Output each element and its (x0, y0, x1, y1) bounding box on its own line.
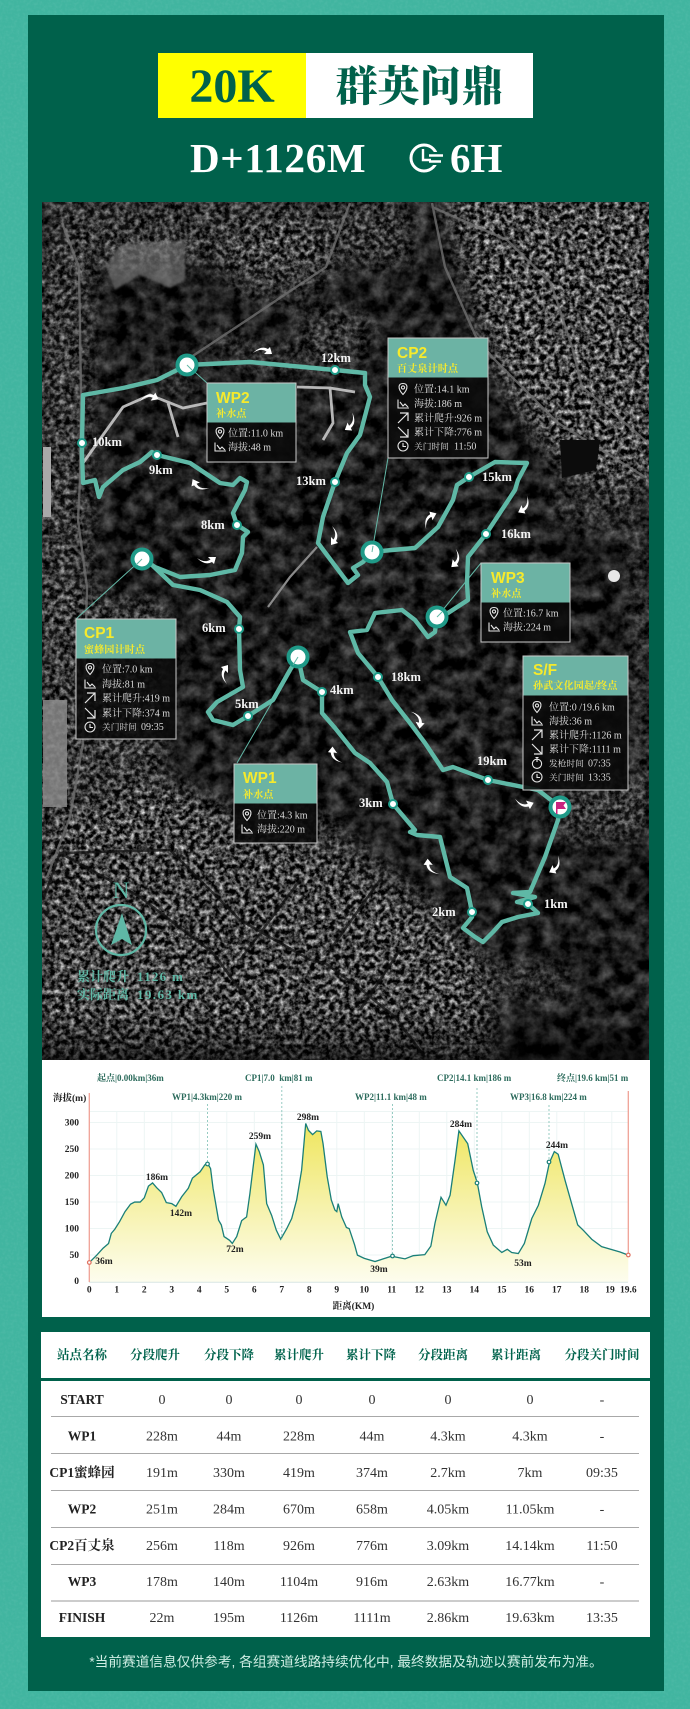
row: START: 0 (444, 1393, 452, 1408)
row: WP1 (68, 1428, 605, 1444)
kilometre markers: 9km (149, 463, 173, 477)
kilometre markers: 16km (501, 527, 531, 541)
y axis labels: 50 (70, 1251, 79, 1261)
callout: CP2 (388, 338, 488, 458)
callout: S/F: 孙武文化园起/终点 (533, 679, 618, 692)
kilometre markers: 19km (477, 754, 507, 768)
callout: WP3: 海拔:224 m (503, 620, 551, 634)
waypoint labels: WP1|4.3km|220 m (172, 1092, 242, 1102)
table header (41, 1332, 650, 1378)
x axis labels: 13 (442, 1286, 452, 1296)
panel: elevation profile chart (42, 1060, 650, 1317)
callout: S/F: 13:35 (588, 772, 611, 784)
kilometre markers: 8km (201, 518, 225, 532)
row: FINISH: 19.63km (505, 1611, 555, 1626)
callout: CP2: 海拔:186 m (414, 397, 462, 410)
x axis labels: 3 (169, 1286, 174, 1296)
row: CP2: 11:50 (586, 1539, 618, 1554)
y axis labels: 250 (65, 1145, 79, 1155)
kilometre markers: 4km (330, 683, 354, 697)
x axis labels: 18 (580, 1286, 589, 1296)
callout: S/F: 位置:0 /19.6 km (549, 702, 615, 714)
row: CP1: 374m (356, 1466, 388, 1481)
row: FINISH (59, 1610, 618, 1626)
course totals (77, 969, 199, 1002)
x axis labels: 12 (415, 1286, 424, 1296)
title tag: race name (306, 53, 533, 118)
row: WP1: 44m (360, 1430, 385, 1444)
waypoint labels: CP2|14.1 km|186 m (437, 1073, 512, 1083)
callout: WP3: 补水点 (491, 587, 522, 600)
map imagery: forest and urban texture (42, 202, 649, 1060)
row: CP1: 09:35 (586, 1466, 618, 1481)
kilometre markers (78, 351, 568, 919)
y axis labels (53, 1092, 86, 1287)
row: FINISH: FINISH (59, 1610, 106, 1625)
row: START: 0 (226, 1393, 232, 1408)
course totals: 实际距离 (77, 987, 129, 1002)
row: WP3: 140m (213, 1575, 245, 1590)
x axis labels: 7 (279, 1286, 284, 1296)
row: WP3: 178m (146, 1575, 178, 1590)
callout: S/F: 关门时间 (549, 772, 584, 782)
callout: S/F: 累计下降:1111 m (549, 742, 621, 756)
x axis labels: 10 (360, 1286, 369, 1296)
x axis labels: 2 (142, 1286, 147, 1296)
table header: 累计距离 (491, 1347, 541, 1362)
callout: CP2: 位置:14.1 km (414, 384, 470, 396)
race stats: elevation gain and cut-off: D+1126M (190, 135, 366, 181)
row: FINISH: 1111m (353, 1611, 391, 1626)
course totals: 19.63 km (137, 987, 199, 1002)
x axis labels: 6 (252, 1286, 257, 1296)
start/finish flag marker (550, 798, 570, 816)
x axis labels: 距离(KM) (333, 1300, 374, 1312)
row: CP2: 926m (283, 1539, 315, 1554)
title tag: distance (158, 53, 306, 118)
row: FINISH: 1126m (280, 1611, 318, 1626)
callout: CP1: 海拔:81 m (102, 678, 145, 690)
callout: CP1: CP1 (84, 625, 115, 642)
row: CP2 (49, 1537, 618, 1554)
row: WP3: - (600, 1575, 605, 1590)
row: WP2 (68, 1502, 605, 1518)
direction arrows (139, 347, 564, 878)
x axis labels: 19 (605, 1286, 615, 1296)
x axis labels (87, 1286, 637, 1312)
title tag: race name: 群英问鼎 (335, 64, 504, 111)
table header: 累计下降 (346, 1347, 396, 1362)
kilometre markers: 18km (391, 670, 421, 684)
row: START: 0 (368, 1393, 376, 1408)
icon: north compass (96, 878, 146, 955)
callout: CP1: 累计爬升:419 m (102, 692, 170, 704)
kilometre markers: 2km (432, 905, 456, 919)
row: WP1: 4.3km (512, 1430, 548, 1444)
kilometre markers: 6km (202, 621, 226, 635)
callout: CP2: 百丈泉计时点 (397, 362, 459, 375)
x axis labels: 4 (197, 1286, 202, 1296)
y axis labels: 150 (65, 1198, 79, 1208)
x axis labels: 9 (334, 1286, 339, 1296)
title tag: distance: 20K (189, 60, 275, 113)
callout: CP2: 累计爬升:926 m (414, 412, 482, 424)
y axis labels: 0 (74, 1277, 79, 1287)
callout: CP1: 关门时间 (102, 721, 137, 732)
row: START: 0 (526, 1393, 534, 1408)
row: FINISH: 22m (150, 1611, 175, 1626)
table header: 分段关门时间 (564, 1347, 640, 1362)
row: WP2: 251m (146, 1502, 178, 1518)
waypoint labels (97, 1072, 629, 1102)
waypoint labels: 终点|19.6 km|51 m (557, 1072, 629, 1083)
y axis labels: 300 (65, 1118, 79, 1128)
callout: WP1: 补水点 (243, 788, 274, 801)
callout: WP2: WP2 (216, 390, 250, 407)
x axis labels: 19.6 (620, 1286, 637, 1296)
footnote: *当前赛道信息仅供参考, 各组赛道线路持续优化中, 最终数据及轨迹以赛前发布为准。 (89, 1654, 603, 1670)
title banner (158, 53, 533, 118)
callout: WP3: WP3 (491, 570, 525, 587)
row: FINISH: 13:35 (586, 1611, 618, 1626)
race stats: elevation gain and cut-off (190, 135, 502, 181)
callout: CP2: CP2 (397, 345, 427, 362)
x axis labels: 16 (525, 1286, 534, 1296)
row: CP1: CP1蜜蜂园 (49, 1464, 115, 1480)
callout: CP2: 累计下降:776 m (414, 426, 482, 438)
profile point markers (88, 1160, 630, 1264)
row: WP1: 44m (217, 1430, 242, 1444)
kilometre markers: 12km (321, 351, 351, 365)
callout: CP1: 09:35 (141, 722, 164, 733)
callout: WP2: 位置:11.0 km (228, 428, 283, 440)
row: CP1: 2.7km (430, 1466, 466, 1481)
x axis labels: 14 (470, 1286, 479, 1296)
callout: CP2: 关门时间 (414, 440, 449, 452)
kilometre markers: 3km (359, 796, 383, 810)
elevation area and line (89, 1123, 628, 1282)
callout: CP1 (76, 619, 176, 739)
peak and valley labels: 72m (226, 1245, 244, 1255)
callout: S/F: 07:35 (588, 758, 611, 770)
row: CP2: 256m (146, 1539, 178, 1554)
table header: 分段爬升 (130, 1347, 180, 1362)
row: WP2: 658m (356, 1502, 388, 1518)
callout: S/F: 海拔:36 m (549, 714, 592, 728)
row: WP2: 11.05km (506, 1502, 555, 1518)
icon: north compass: N (113, 878, 130, 903)
row: CP2: 776m (356, 1539, 388, 1554)
row: WP1: 4.3km (430, 1430, 466, 1444)
callout: CP1: 蜜蜂园计时点 (84, 643, 146, 656)
row: CP1: 330m (213, 1466, 245, 1481)
y axis labels: 200 (65, 1172, 79, 1182)
callout: CP1: 位置:7.0 km (102, 664, 153, 676)
row: WP3: 1104m (280, 1575, 318, 1590)
x axis labels: 1 (114, 1286, 119, 1296)
checkpoint ring markers (132, 356, 446, 666)
row: WP1: 228m (283, 1430, 315, 1444)
row: WP3: WP3 (68, 1574, 96, 1589)
row: FINISH: 2.86km (427, 1611, 469, 1626)
chart grid (89, 1111, 628, 1282)
row: START: 0 (296, 1393, 302, 1408)
y axis labels: 海拔(m) (53, 1092, 86, 1104)
peak and valley labels: 36m (95, 1257, 113, 1267)
waypoint labels: WP2|11.1 km|48 m (355, 1092, 427, 1102)
y axis labels: 100 (65, 1224, 79, 1234)
row: WP2: WP2 (68, 1502, 96, 1516)
callout: S/F: 累计爬升:1126 m (549, 728, 622, 742)
peak and valley labels: 298m (297, 1113, 319, 1123)
x axis labels: 0 (87, 1286, 92, 1296)
callout: WP2: 补水点 (216, 407, 247, 420)
x axis labels: 5 (224, 1286, 229, 1296)
kilometre markers: 1km (544, 897, 568, 911)
row: WP3: 16.77km (505, 1575, 555, 1590)
callout: WP2: 海拔:48 m (228, 440, 271, 454)
row: CP1: 191m (146, 1466, 178, 1481)
peak and valley labels: 284m (450, 1120, 472, 1130)
row: WP2: 284m (213, 1502, 245, 1518)
row: CP2: 14.14km (505, 1539, 555, 1554)
course totals: 1126 m (137, 969, 184, 984)
row: FINISH: 195m (213, 1611, 245, 1626)
callout: S/F: S/F (533, 662, 557, 679)
callout: S/F: 发枪时间 (549, 758, 584, 768)
table body background (41, 1381, 650, 1637)
row: CP1 (49, 1464, 618, 1481)
callout leader lines (76, 365, 481, 763)
peak and valley labels (95, 1113, 568, 1275)
waypoint labels: CP1|7.0 km|81 m (245, 1073, 313, 1083)
peak and valley labels: 53m (514, 1259, 532, 1269)
row: CP2: 3.09km (427, 1539, 469, 1554)
callout: CP1: 累计下降:374 m (102, 706, 170, 720)
row: CP1: 419m (283, 1466, 315, 1481)
waypoint dashed lines (208, 1086, 549, 1256)
table header: 累计爬升 (274, 1347, 324, 1362)
kilometre markers: 13km (296, 474, 326, 488)
callout: S/F (523, 656, 628, 790)
table header: 分段下降 (204, 1347, 254, 1362)
x axis labels: 15 (497, 1286, 507, 1296)
x axis labels: 17 (552, 1286, 562, 1296)
kilometre markers: 5km (235, 697, 259, 711)
start and finish vertical markers (89, 1091, 628, 1282)
row: WP2: - (600, 1502, 605, 1518)
peak and valley labels: 259m (249, 1132, 271, 1142)
row: CP1: 7km (518, 1466, 543, 1481)
race route line (82, 362, 560, 942)
callout: WP3 (481, 563, 570, 642)
x axis labels: 8 (307, 1286, 312, 1296)
peak and valley labels: 142m (170, 1209, 192, 1219)
peak and valley labels: 186m (146, 1173, 168, 1183)
row: START (60, 1392, 605, 1408)
callout: WP1 (234, 764, 317, 843)
row: WP1: 228m (146, 1430, 178, 1444)
row: WP3: 916m (356, 1575, 388, 1590)
row: WP3: 2.63km (427, 1575, 469, 1590)
row: WP2: 4.05km (427, 1502, 469, 1518)
row: WP2: 670m (283, 1502, 315, 1518)
peak and valley labels: 244m (546, 1141, 568, 1151)
x axis labels: 11 (387, 1286, 397, 1296)
row: START: 0 (158, 1393, 166, 1408)
row: WP1: WP1 (68, 1428, 96, 1444)
callout: WP1: 位置:4.3 km (257, 810, 308, 822)
race stats: elevation gain and cut-off: 6H (450, 135, 502, 181)
row: START: - (600, 1393, 605, 1408)
row: CP2: CP2百丈泉 (49, 1537, 115, 1553)
callout: WP3: 位置:16.7 km (503, 608, 559, 620)
panel: satellite course map (42, 202, 649, 1060)
kilometre markers: 10km (92, 435, 122, 449)
table header: 站点名称 (57, 1347, 108, 1362)
course totals: 累计爬升 (77, 969, 129, 984)
callout: WP1: 海拔:220 m (257, 822, 305, 836)
waypoint labels: 起点|0.00km|36m (97, 1072, 164, 1083)
icon: clock (411, 145, 445, 171)
peak and valley labels: 39m (370, 1265, 388, 1275)
row: START: START (60, 1392, 104, 1407)
callout: CP2: 11:50 (454, 442, 476, 452)
waypoint labels: WP3|16.8 km|224 m (510, 1092, 587, 1102)
row: CP2: 118m (213, 1539, 245, 1554)
kilometre markers: 15km (482, 470, 512, 484)
table header: 分段距离 (418, 1347, 468, 1362)
callout: WP1: WP1 (243, 770, 277, 787)
row: WP3 (68, 1574, 605, 1590)
callout: WP2 (207, 383, 296, 462)
panel: checkpoint table (41, 1332, 650, 1637)
row: WP1: - (600, 1430, 605, 1444)
